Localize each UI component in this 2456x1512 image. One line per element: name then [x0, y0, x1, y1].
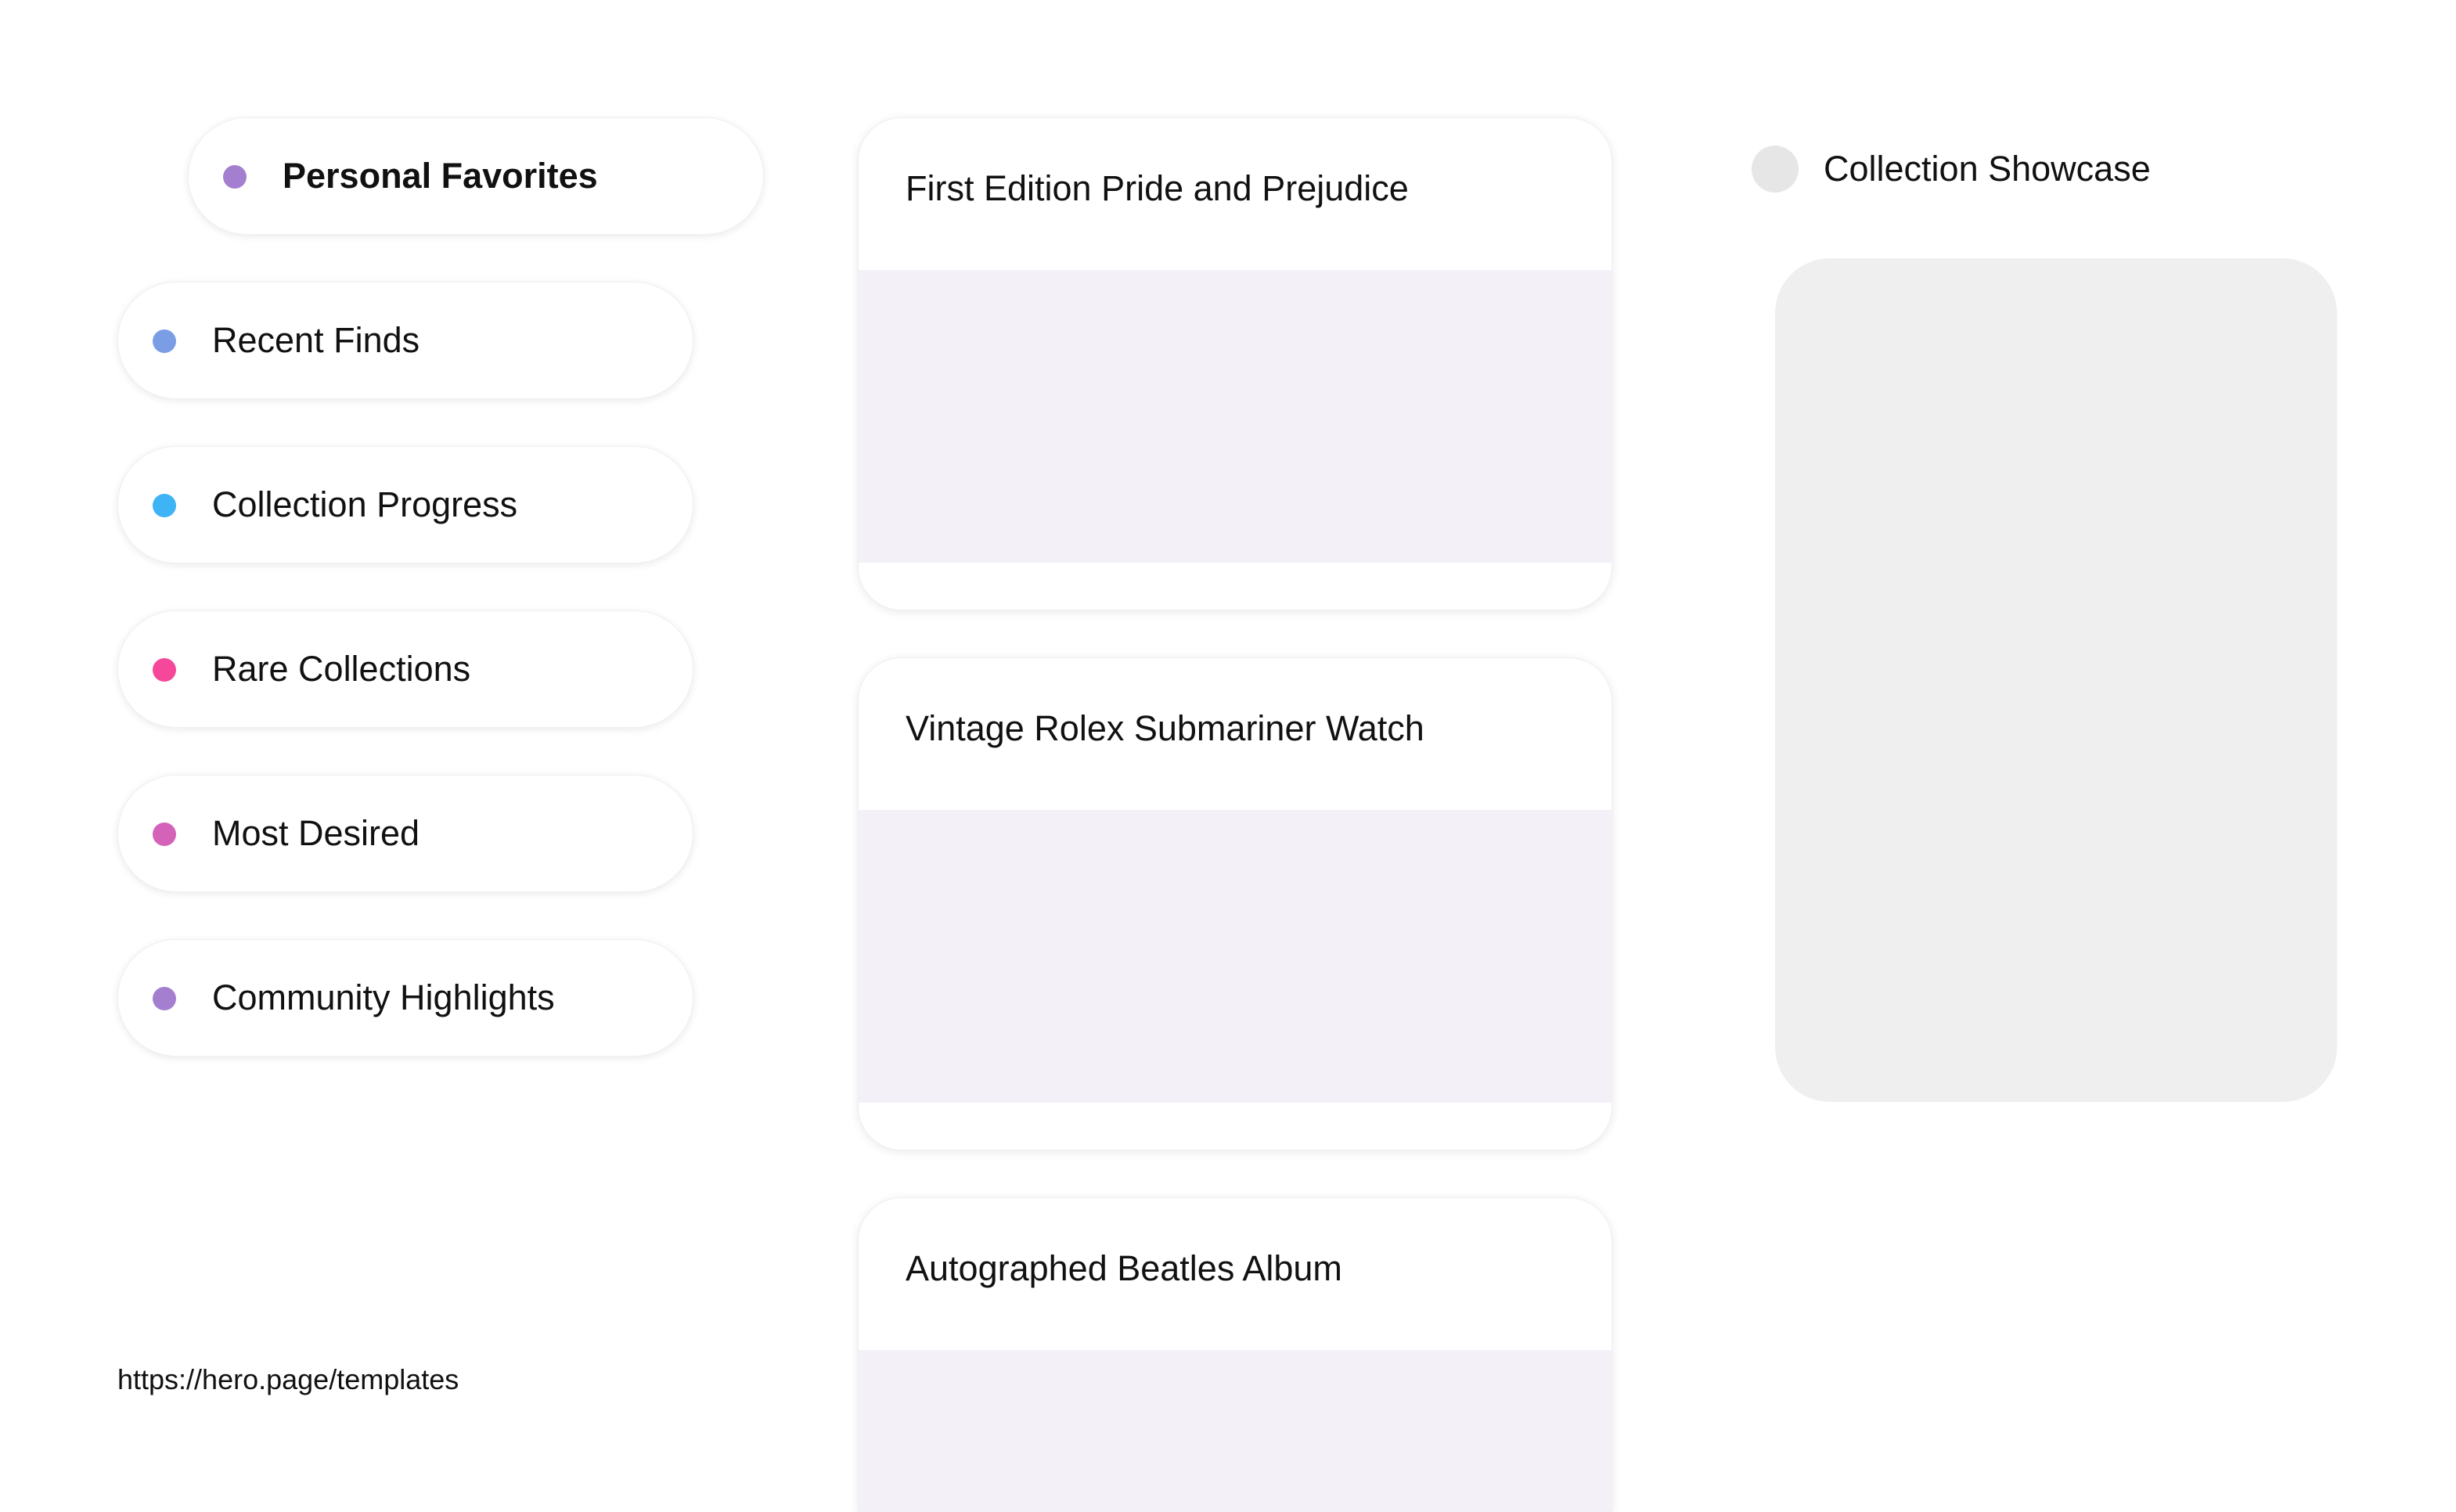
- card title: Autographed Beatles Album: [906, 1248, 1342, 1288]
- label: Rare Collections: Rare Collections: [212, 649, 470, 689]
- label: Community Highlights: Community Highlights: [212, 977, 555, 1017]
- card title: First Edition Pride and Prejudice: [906, 168, 1409, 208]
- icon: purple dot: [223, 165, 247, 189]
- pill: Most Desired: [117, 775, 693, 892]
- image placeholder: [859, 810, 1612, 1103]
- label: Collection Progress: Collection Progress: [212, 484, 517, 524]
- showcase header: [1752, 146, 2151, 193]
- icon: violet dot: [153, 987, 176, 1010]
- card: Autographed Beatles Album: [858, 1197, 1612, 1512]
- card: Vintage Rolex Submariner Watch: [858, 657, 1612, 1150]
- label: Recent Finds: Recent Finds: [212, 320, 420, 360]
- footer url: https://hero.page/templates: [117, 1363, 459, 1395]
- card title: Vintage Rolex Submariner Watch: [906, 708, 1424, 748]
- card: First Edition Pride and Prejudice: [858, 117, 1612, 610]
- image placeholder: [859, 1350, 1612, 1512]
- image placeholder: [859, 270, 1612, 563]
- icon: gray circle: [1752, 146, 1799, 193]
- pill: Rare Collections: [117, 610, 693, 728]
- icon: pink dot: [153, 658, 176, 682]
- icon: blue dot: [153, 329, 176, 353]
- showcase panel: [1775, 258, 2337, 1102]
- label: Most Desired: Most Desired: [212, 813, 420, 853]
- icon: cyan dot: [153, 494, 176, 517]
- pill: Personal Favorites: [188, 117, 764, 235]
- label: Collection Showcase: Collection Showcase: [1824, 149, 2151, 189]
- label: Personal Favorites: Personal Favorites: [283, 156, 598, 196]
- icon: magenta dot: [153, 823, 176, 846]
- pill: Collection Progress: [117, 446, 693, 563]
- pill: Community Highlights: [117, 939, 693, 1057]
- pill: Recent Finds: [117, 282, 693, 399]
